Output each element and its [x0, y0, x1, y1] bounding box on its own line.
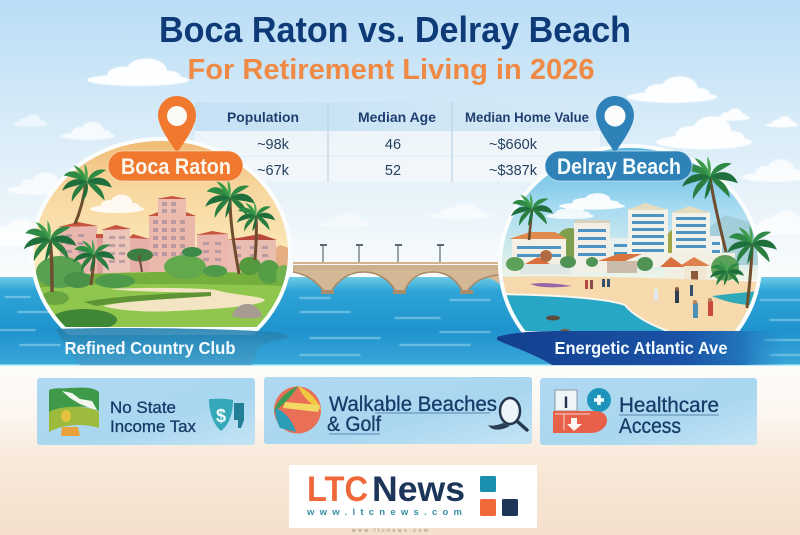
- table row: Boca Raton: [195, 131, 600, 156]
- text: Walkable Beaches and Golf: [327, 393, 497, 436]
- text: No State Income Tax: [110, 398, 196, 436]
- text: Healthcare Access: [619, 394, 719, 438]
- palms: Boca Raton: [24, 164, 275, 292]
- pavilions: [506, 250, 739, 281]
- pin: Delray Beach: [596, 96, 634, 153]
- text: Walkable Beaches and Golf: & Golf: [327, 413, 381, 436]
- panel: Walkable Beaches & Golf: [264, 377, 532, 444]
- label: Boca Raton: Boca Raton: [121, 154, 231, 179]
- logo: LTC News: [289, 465, 537, 528]
- icon: magnifier with golf ball: [488, 398, 527, 430]
- clouds: [0, 58, 800, 246]
- table row: Boca Raton: 46: [385, 137, 401, 153]
- sea highlights: [0, 297, 800, 355]
- table header row: [195, 102, 600, 131]
- ribbon: Energetic Atlantic Ave: Energetic Atlantic Ave: [554, 338, 728, 358]
- ribbon: Refined Country Club: Refined Country Club: [64, 338, 236, 358]
- bridge: [293, 245, 499, 294]
- buildings: [58, 196, 277, 275]
- ribbon: Refined Country Club: [56, 328, 288, 365]
- table row: Boca Raton: ~$660k: [489, 137, 538, 153]
- logo: LTC News: News: [372, 470, 465, 509]
- comparison table: [195, 102, 600, 182]
- logo: LTC News: www.ltcnews.com: [306, 507, 462, 518]
- table row: Delray Beach: [195, 157, 600, 182]
- palms: Delray Beach: [511, 156, 777, 308]
- beachgoers: [546, 279, 713, 333]
- table row: Delray Beach: 52: [385, 163, 401, 179]
- table header row: Median Age: [358, 109, 436, 125]
- table row: Delray Beach: ~67k: [257, 163, 290, 179]
- lawn: [37, 272, 286, 327]
- title: Boca Raton vs. Delray Beach: [159, 9, 631, 50]
- sand and lower band: [0, 365, 800, 535]
- icon: healthcare kit: I: [564, 393, 568, 412]
- icon: healthcare kit: [553, 388, 611, 433]
- buildings: [509, 203, 735, 283]
- logo: LTC News: LTC: [307, 470, 368, 509]
- beach: [502, 276, 756, 331]
- pin: Boca Raton: [158, 96, 196, 153]
- table row: Delray Beach: ~$387k: [489, 163, 538, 179]
- text: No State Income Tax: No State: [110, 398, 176, 417]
- subtitle: For Retirement Living in 2026: [188, 54, 594, 86]
- panel: No State Income Tax: [37, 378, 255, 445]
- table row: Boca Raton: ~98k: [257, 137, 290, 153]
- source note: Based on U.S. Census Bureau estimates (2024 release): [290, 189, 500, 199]
- background: sea: [0, 277, 800, 365]
- table header row: Population: [227, 109, 299, 125]
- sand bunker: [103, 288, 265, 312]
- shrubs: [36, 247, 292, 331]
- text: Walkable Beaches and Golf: Walkable Beaches: [329, 393, 497, 416]
- ribbon: Energetic Atlantic Ave: [497, 331, 785, 365]
- panel: Delray Beach scene: [498, 144, 762, 332]
- rocks: [232, 304, 262, 318]
- panel: Healthcare Access: [540, 378, 757, 445]
- icon: Florida map: [49, 388, 99, 436]
- text: No State Income Tax: Income Tax: [110, 417, 196, 436]
- text: Healthcare Access: Access: [619, 415, 681, 438]
- faint footer url: www.ltcnews.com: [352, 528, 428, 534]
- icon: dollar shield: [209, 399, 244, 431]
- icon: dollar shield: $: [216, 406, 226, 426]
- hedge: [84, 292, 211, 306]
- icon: beach umbrella: [274, 386, 321, 434]
- panel: Boca Raton scene: [32, 137, 292, 335]
- table header row: Median Home Value: [465, 109, 589, 125]
- text: Healthcare Access: Healthcare: [619, 394, 719, 417]
- label: Delray Beach: Delray Beach: [557, 154, 681, 179]
- background: sky: [0, 0, 800, 280]
